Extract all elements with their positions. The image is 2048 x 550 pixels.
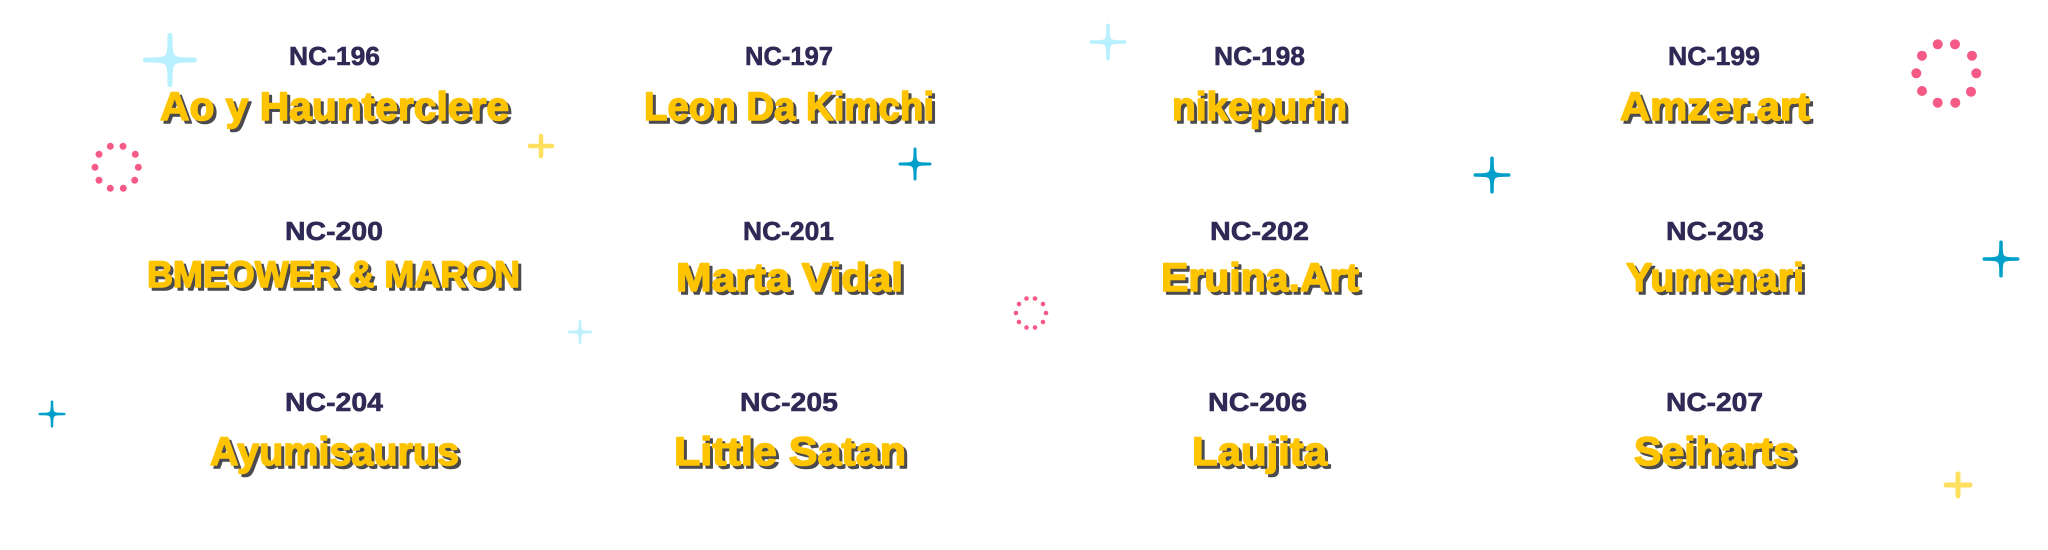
icon: light blue sparkle top left <box>146 36 194 84</box>
artist name: Amzer.art <box>1620 85 1810 129</box>
id label: NC-199 <box>1668 41 1760 71</box>
id label: NC-202 <box>1210 216 1309 246</box>
id label: NC-206 <box>1208 387 1307 417</box>
artist name: Laujita <box>1192 430 1328 474</box>
entry: NC-204 <box>210 387 459 474</box>
entry: NC-206 <box>1192 387 1328 474</box>
icon: pale blue sparkle middle <box>569 321 591 343</box>
artist name: Seiharts <box>1634 430 1796 474</box>
icon: light blue sparkle top centre <box>1091 25 1125 59</box>
entry: NC-205 <box>674 387 906 474</box>
artist name: Little Satan <box>674 430 906 474</box>
entry: NC-202 <box>1161 216 1359 300</box>
icon: pink dotted ring top right <box>1911 39 1981 108</box>
entry: NC-201 <box>676 216 903 300</box>
entry: NC-200 <box>147 216 520 295</box>
artist name: BMEOWER & MARON <box>147 254 520 295</box>
entry: NC-207 <box>1634 387 1796 474</box>
icon: small pink dotted ring centre <box>1014 296 1048 330</box>
icon: blue sparkle centre right <box>1475 158 1509 192</box>
id label: NC-197 <box>745 41 833 71</box>
id label: NC-203 <box>1666 216 1764 246</box>
id label: NC-196 <box>289 41 380 71</box>
artist name: nikepurin <box>1172 85 1347 129</box>
artist name: Eruina.Art <box>1161 256 1359 300</box>
icon: yellow plus near NC-196 <box>530 136 552 156</box>
id label: NC-200 <box>285 216 383 246</box>
icon: blue sparkle bottom left <box>40 402 64 426</box>
artist name: Ao y Haunterclere <box>160 85 509 129</box>
entry: NC-197 <box>644 41 934 129</box>
id label: NC-204 <box>285 387 384 417</box>
artist name: Leon Da Kimchi <box>644 85 934 129</box>
artist name: Ayumisaurus <box>210 430 459 474</box>
entry: NC-203 <box>1626 216 1804 300</box>
id label: NC-198 <box>1214 41 1305 71</box>
id label: NC-205 <box>740 387 838 417</box>
entry: NC-196 <box>160 41 509 129</box>
artist name: Yumenari <box>1626 256 1804 300</box>
entry: NC-199 <box>1620 41 1810 129</box>
icon: pink dotted ring left <box>92 143 142 192</box>
icon: blue sparkle far right <box>1984 242 2018 276</box>
icon: blue sparkle near NC-197 <box>900 149 930 179</box>
id label: NC-201 <box>743 216 834 246</box>
entry: NC-198 <box>1172 41 1347 129</box>
artist name: Marta Vidal <box>676 256 903 300</box>
id label: NC-207 <box>1666 387 1763 417</box>
icon: yellow plus bottom right <box>1946 474 1970 496</box>
